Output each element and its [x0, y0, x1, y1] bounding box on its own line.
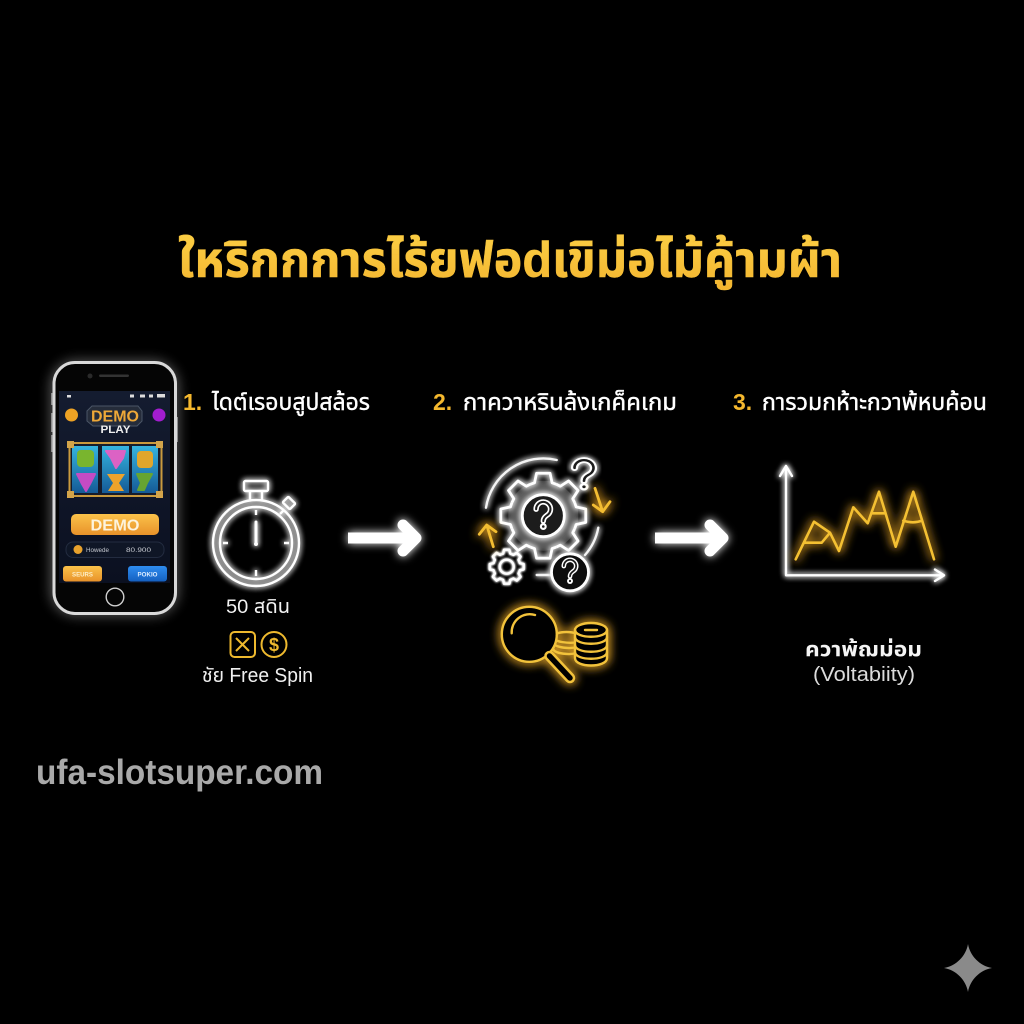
balance bar: Howede [86, 547, 109, 554]
demo button: DEMO [90, 518, 140, 534]
icon: cross box and dollar coin [230, 632, 286, 657]
icon: sparkle star [944, 944, 992, 992]
step 3 heading: การวมกห้าะกวาพ้หบค้อน [762, 389, 987, 415]
volatility sublabel: (Voltabiity) [813, 664, 915, 686]
icon: gears and question marks [479, 458, 610, 591]
step 3 heading: 3. [733, 389, 752, 415]
magnifier lens [502, 607, 557, 662]
large coin stack [575, 623, 607, 666]
large gear [501, 473, 586, 558]
yellow cycle arrows [479, 488, 610, 547]
blue button: POKIO [138, 572, 158, 578]
coin right [152, 408, 166, 422]
step 1 heading: 1. [183, 389, 202, 415]
volatility label: ควาพ้ฌม่อม [805, 639, 922, 661]
phone screen [59, 391, 170, 583]
volatility line [796, 492, 934, 559]
step 2 heading: กาควาหรินล้งเกค็คเกม [463, 389, 677, 415]
floating question mark [574, 460, 593, 491]
orange button [63, 566, 102, 582]
step 2 heading: 2. [433, 389, 452, 415]
stopwatch label: 50 สดิน [226, 596, 290, 618]
orbit arcs [486, 458, 598, 575]
magnifier handle [550, 656, 570, 678]
coin left [65, 408, 78, 422]
icon: magnifier with coin stacks [502, 607, 607, 678]
demo badge: DEMO [91, 408, 139, 426]
chart axes [780, 466, 944, 581]
blue button [128, 566, 167, 582]
free spin label: ชัย Free Spin [202, 665, 313, 687]
icon: stopwatch [213, 481, 299, 586]
arrow 1 [348, 525, 416, 551]
phone status bar [67, 394, 165, 398]
step 1 heading: ไดต์เรอบสูปสล้อร [211, 389, 370, 417]
demo button [71, 514, 159, 535]
small coin stack [553, 632, 580, 654]
orange button: SEURS [72, 572, 94, 578]
icon: phone with demo slot game [50, 360, 179, 616]
chart: volatility line [780, 466, 944, 581]
demo badge: PLAY [100, 424, 131, 436]
small gear [490, 550, 524, 584]
demo badge [87, 406, 142, 436]
balance bar [66, 542, 164, 558]
balance bar: 80.900 [126, 547, 151, 554]
slot reels [67, 441, 163, 498]
question bubble [552, 554, 588, 591]
icon: cross box and dollar coin: $ [269, 635, 279, 655]
website url: ufa-slotsuper.com [36, 753, 323, 792]
title: ใหริกกการไร้ยฟอdเขิม่อไม้คู้ามผ้า [178, 232, 842, 290]
phone home button [106, 588, 124, 606]
arrow 2 [655, 525, 723, 551]
